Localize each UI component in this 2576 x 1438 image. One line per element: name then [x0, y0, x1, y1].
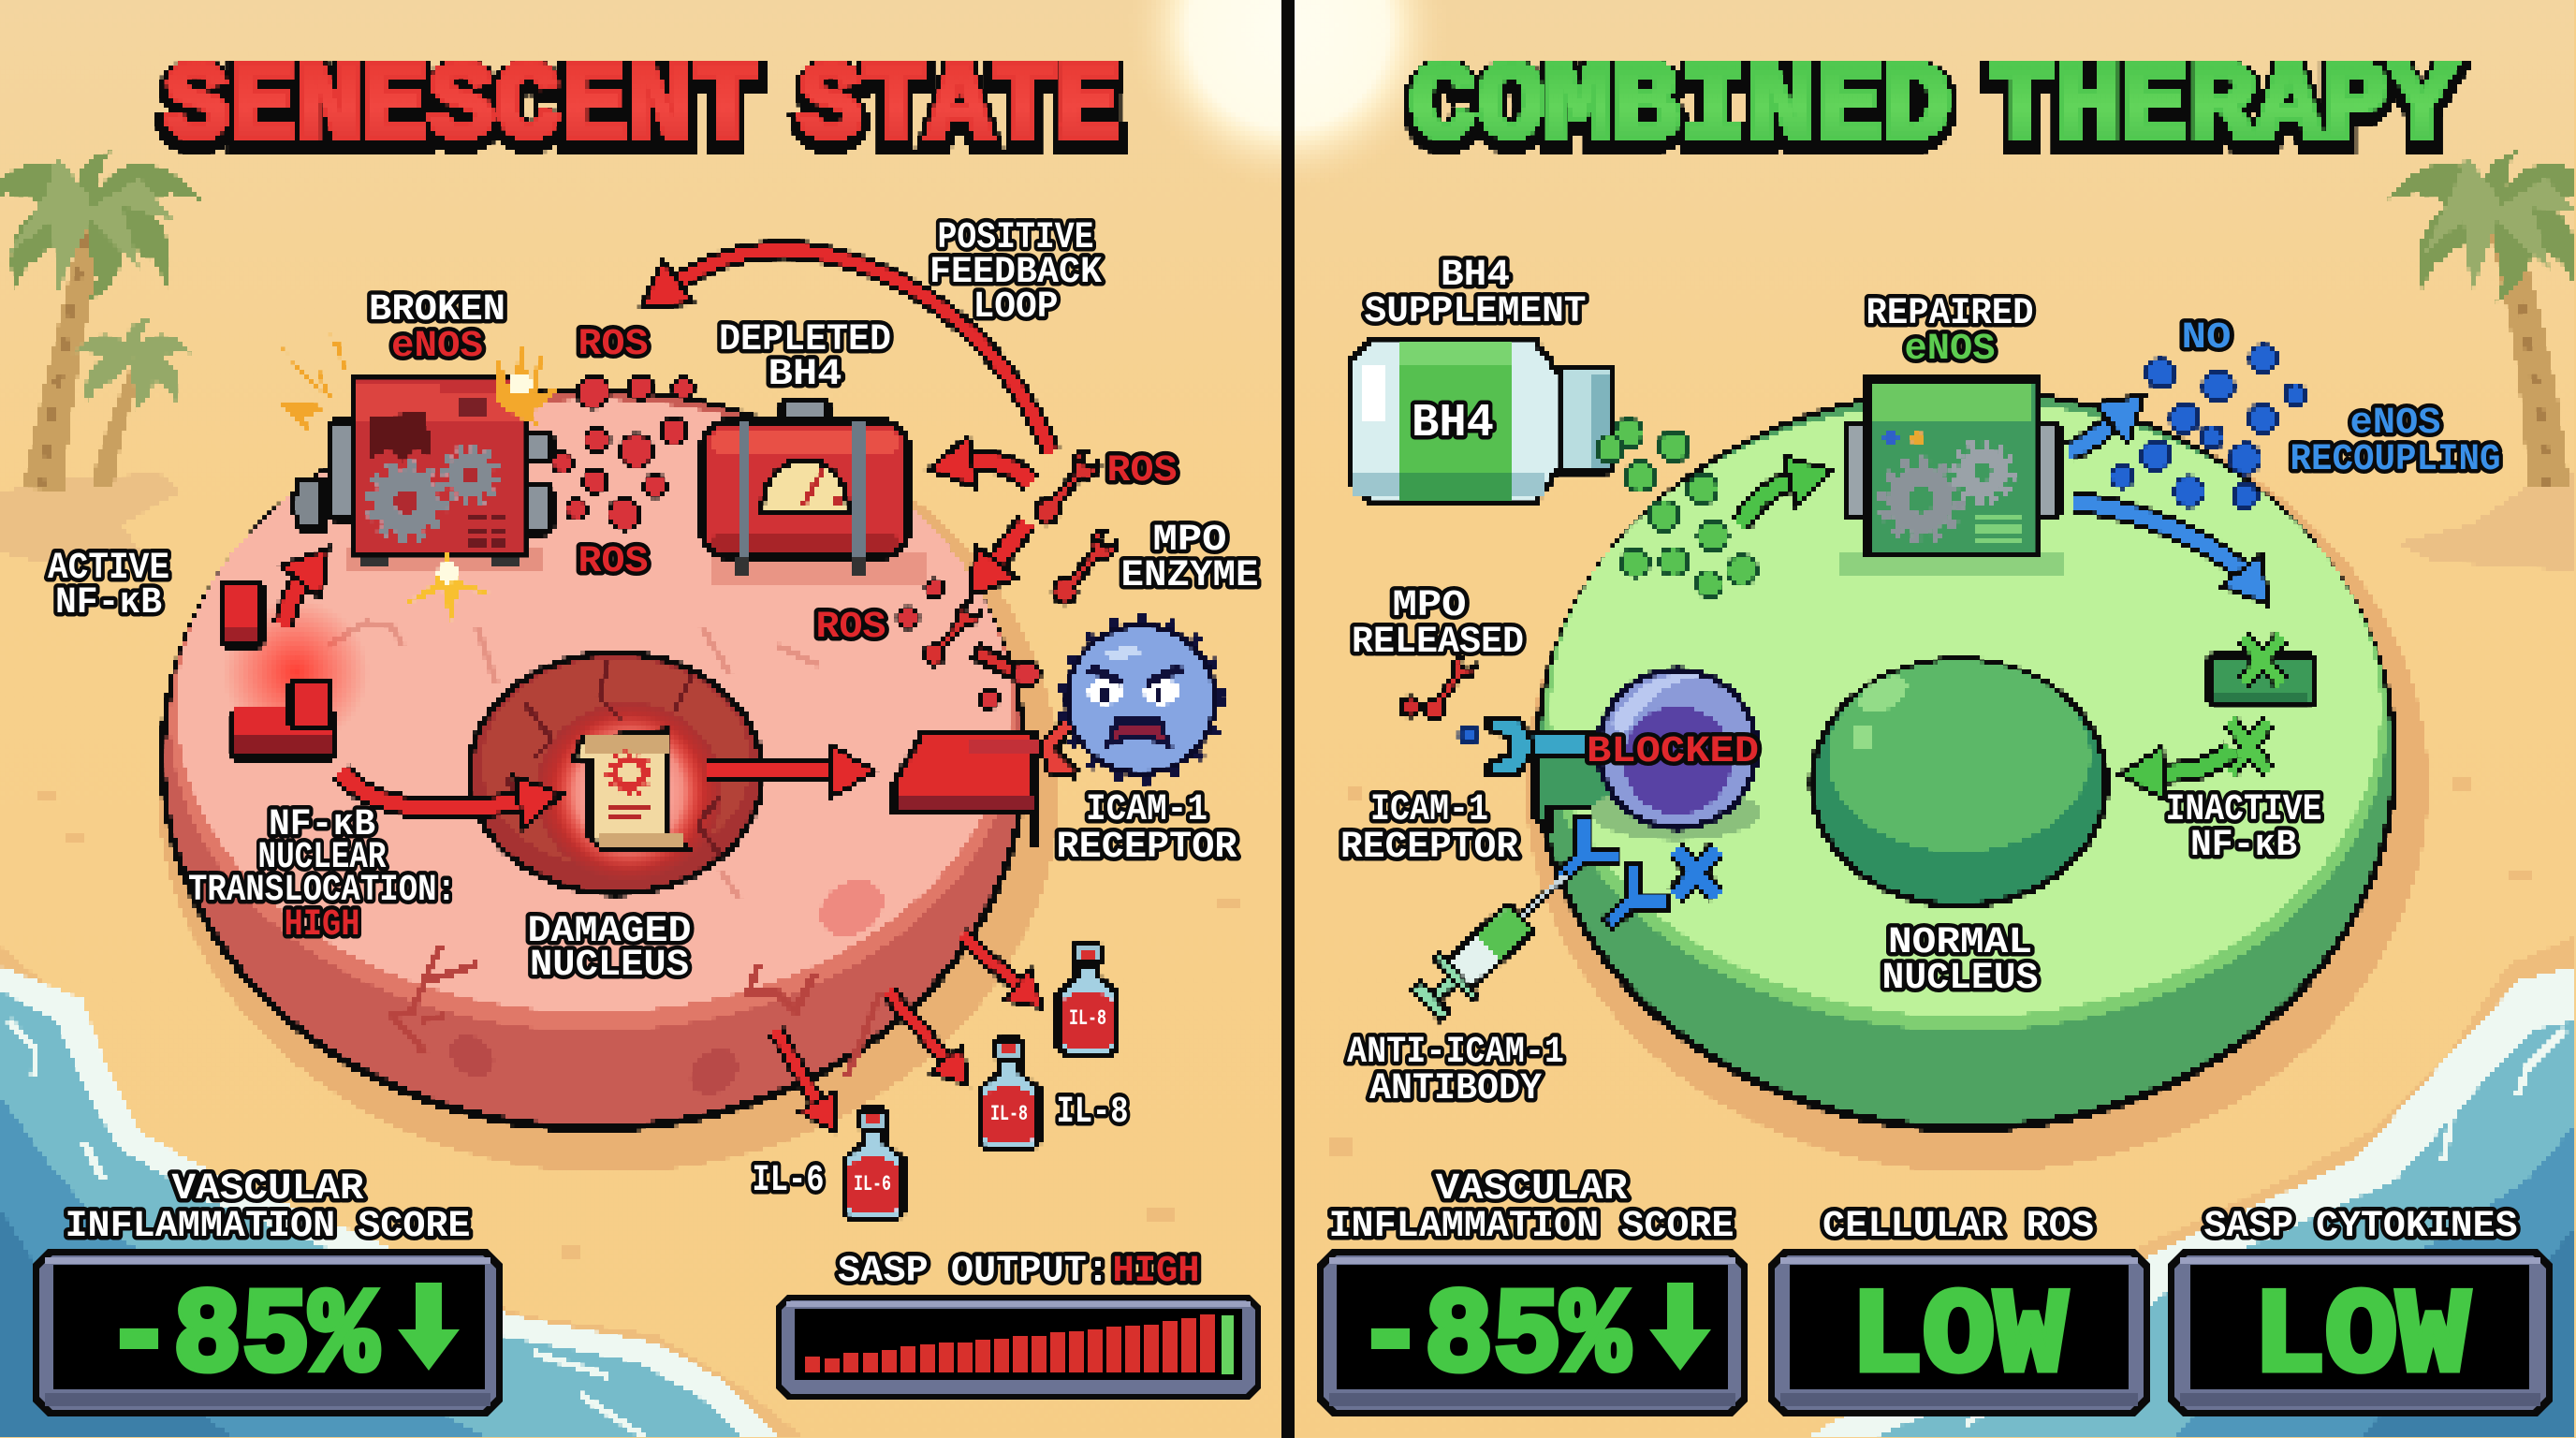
- labels: senescent state: ROS: [1106, 450, 1178, 492]
- panel: SASP cytokines: LOW: [2253, 1271, 2470, 1406]
- labels: senescent state: IL-6: [854, 1172, 891, 1196]
- labels: senescent state: ROS: [578, 541, 648, 583]
- labels: senescent state: BROKEN: [369, 289, 505, 331]
- labels: senescent state: ENZYME: [1121, 555, 1258, 597]
- title: combined therapy: COMBINED: [1410, 46, 1951, 170]
- icon: antibodies: [1565, 824, 1717, 918]
- arrows: therapy pathway: [1740, 418, 2247, 773]
- icon: ICAM-1 receptor: [894, 717, 1076, 847]
- title: senescent state: STATE: [798, 46, 1120, 170]
- icon: left water: [0, 946, 805, 1438]
- icon: active NF-kB: [223, 582, 369, 758]
- labels: combined therapy: INACTIVE: [2166, 789, 2321, 831]
- panel: right vascular inflammation score: [1317, 1168, 1748, 1416]
- panel: senescent cell artwork: [157, 250, 1222, 1220]
- panel: cellular ROS: [1768, 1206, 2150, 1416]
- icon: sun: [1129, 0, 1447, 187]
- icon: syringe: [1407, 854, 1586, 1026]
- title: senescent state: SENESCENT: [164, 52, 759, 177]
- labels: combined therapy: RELEASED: [1352, 622, 1524, 664]
- icon: ROS particles: [552, 375, 1040, 709]
- divider: [1281, 0, 1295, 1438]
- labels: combined therapy: SUPPLEMENT: [1365, 291, 1586, 333]
- labels: senescent state: NUCLEUS: [530, 945, 689, 987]
- labels: combined therapy: NORMAL: [1888, 922, 2032, 964]
- panel: SASP output meter: [776, 1251, 1261, 1400]
- labels: senescent state: HIGH: [285, 904, 359, 946]
- chart: SASP bars: [805, 1314, 1215, 1372]
- labels: senescent state: IL-8: [1056, 1092, 1129, 1134]
- icon: right water: [1806, 936, 2576, 1438]
- icon: scroll: [552, 713, 706, 871]
- icon: BH4 pills: [1597, 419, 1757, 597]
- labels: combined therapy: BLOCKED: [1587, 731, 1759, 773]
- labels: senescent state: DAMAGED: [528, 911, 691, 953]
- panel: SASP output meter: HIGH: [1112, 1251, 1200, 1293]
- labels: senescent state: ROS: [816, 607, 886, 649]
- labels: senescent state: RECEPTOR: [1056, 827, 1237, 869]
- icon: left palm trees: [0, 143, 203, 562]
- panel: cellular ROS: LOW: [1851, 1271, 2068, 1406]
- labels: senescent state: ROS: [578, 324, 648, 366]
- labels: combined therapy: MPO: [1393, 585, 1466, 627]
- sand specks: [37, 777, 2531, 1258]
- labels: senescent state: TRANSLOCATION:: [188, 870, 456, 912]
- icon: depleted BH4 tank: [702, 401, 927, 584]
- labels: senescent state: POSITIVE: [938, 217, 1093, 259]
- title: senescent state: STATE: [798, 52, 1120, 177]
- cell body: [1533, 388, 2398, 1133]
- labels: senescent state: BH4: [768, 354, 842, 396]
- icon: NO particles: [2111, 345, 2305, 508]
- icon: angry monocyte: [1061, 619, 1222, 780]
- title: combined therapy: COMBINED: [1410, 52, 1951, 177]
- panel: left vascular inflammation score: [33, 1168, 503, 1416]
- panel: right vascular inflammation score: INFLAMMATION SCORE: [1329, 1206, 1734, 1248]
- icon: IL vials: [843, 944, 1118, 1220]
- title: senescent state: SENESCENT: [164, 46, 759, 170]
- title: senescent state: [164, 46, 1120, 177]
- title: combined therapy: THERAPY: [1988, 52, 2456, 177]
- title: combined therapy: THERAPY: [1988, 46, 2456, 170]
- icon: repaired eNOS machine: [1839, 379, 2064, 577]
- cell body: [159, 388, 1028, 1133]
- labels: combined therapy: ANTI-ICAM-1: [1347, 1032, 1564, 1074]
- labels: combined therapy: NF-κB: [2190, 825, 2297, 867]
- panel: left vascular inflammation score: -85%: [105, 1271, 379, 1406]
- panel: SASP cytokines: [2168, 1206, 2553, 1416]
- labels: senescent state: NF-κB: [269, 804, 375, 846]
- icon: right palm tree: [2384, 143, 2576, 571]
- labels: combined therapy: ICAM-1: [1370, 789, 1488, 831]
- labels: senescent state: IL-6: [753, 1160, 824, 1202]
- panel: therapy cell artwork: [1351, 341, 2428, 1172]
- arrows: senescent pathway: [284, 250, 1051, 1106]
- labels: senescent state: [48, 217, 1258, 1202]
- title: combined therapy: [1410, 46, 2456, 177]
- labels: senescent state: ICAM-1: [1086, 789, 1208, 831]
- icon: MPO wrenches: [919, 448, 1121, 677]
- icon: sparks: [281, 328, 560, 623]
- labels: combined therapy: RECOUPLING: [2290, 439, 2501, 481]
- panel: right vascular inflammation score: -85%: [1356, 1271, 1631, 1406]
- labels: senescent state: LOOP: [973, 286, 1058, 329]
- labels: senescent state: ACTIVE: [48, 548, 169, 590]
- panel: SASP output meter: SASP OUTPUT:: [838, 1251, 1109, 1293]
- icon: neutralised monocyte: [1591, 667, 1760, 841]
- labels: combined therapy: RECEPTOR: [1340, 827, 1518, 869]
- labels: combined therapy: BH4: [1441, 255, 1510, 297]
- icon: normal nucleus: [1808, 656, 2110, 909]
- labels: senescent state: NUCLEAR: [258, 837, 386, 879]
- labels: combined therapy: ANTIBODY: [1369, 1068, 1542, 1110]
- labels: senescent state: NF-κB: [55, 582, 162, 624]
- panel: left vascular inflammation score: INFLAMMATION SCORE: [66, 1206, 470, 1248]
- labels: combined therapy: NO: [2181, 317, 2232, 360]
- labels: senescent state: IL-8: [990, 1102, 1028, 1126]
- icon: nucleus: [466, 650, 766, 897]
- labels: senescent state: DEPLETED: [719, 319, 891, 361]
- icon: ICAM-1 receptor blocked: [1488, 717, 1619, 829]
- icon: BH4 bottle: [1351, 341, 1612, 502]
- icon: broken eNOS machine: [292, 378, 552, 572]
- labels: combined therapy: [1340, 255, 2501, 1110]
- labels: senescent state: eNOS: [391, 326, 483, 368]
- labels: combined therapy: REPAIRED: [1866, 293, 2033, 335]
- labels: combined therapy: NUCLEUS: [1881, 958, 2039, 1000]
- panel: right vascular inflammation score: VASCULAR: [1436, 1168, 1627, 1211]
- panel: cellular ROS: CELLULAR ROS: [1822, 1206, 2094, 1248]
- labels: senescent state: MPO: [1153, 520, 1226, 562]
- panel: SASP cytokines: SASP CYTOKINES: [2203, 1206, 2518, 1248]
- labels: senescent state: FEEDBACK: [929, 252, 1102, 294]
- labels: combined therapy: eNOS: [2349, 403, 2441, 445]
- labels: combined therapy: BH4: [1412, 397, 1494, 450]
- icon: inactive NF-kB: [2209, 637, 2314, 772]
- labels: senescent state: IL-8: [1069, 1006, 1106, 1031]
- panel: left vascular inflammation score: VASCULAR: [172, 1168, 363, 1211]
- labels: combined therapy: eNOS: [1904, 329, 1996, 371]
- icon: released MPO: [1400, 653, 1478, 743]
